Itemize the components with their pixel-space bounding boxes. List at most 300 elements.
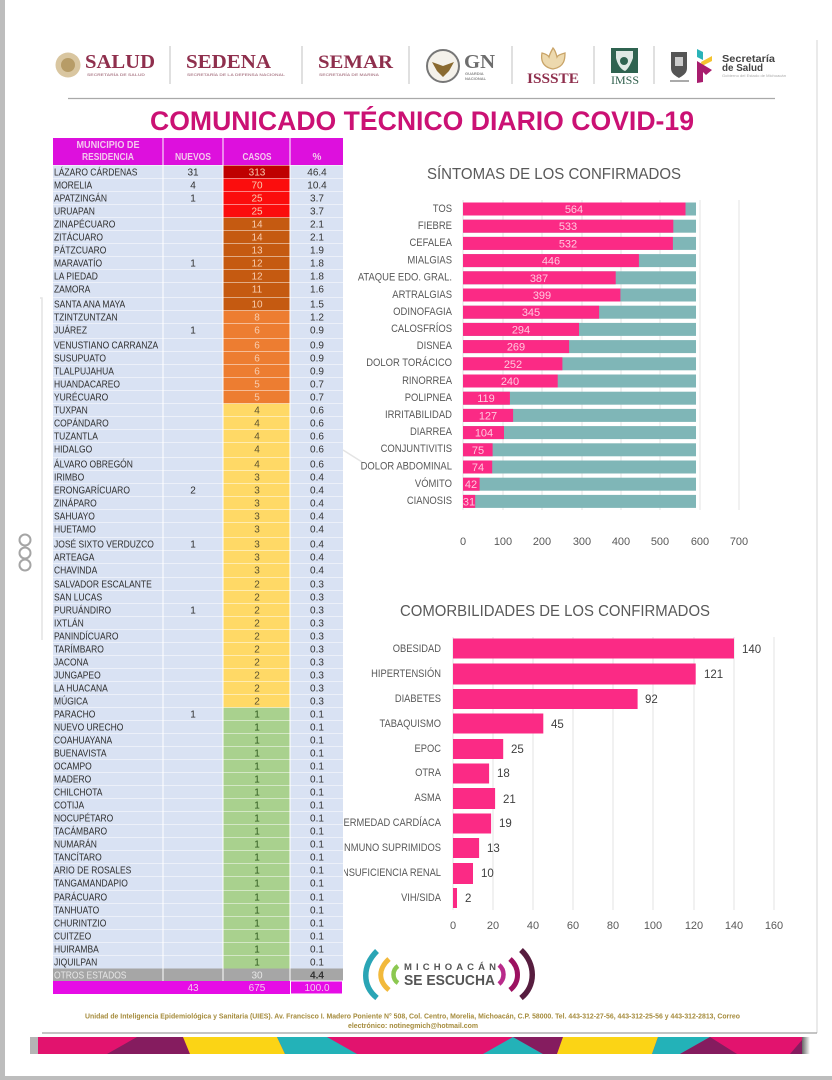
symptom labels: DOLOR TORÁCICO	[366, 355, 452, 369]
icon: binder rings	[20, 534, 30, 570]
otros estados row background	[53, 968, 343, 981]
symptom labels: FIEBRE	[418, 220, 452, 232]
percent column: 1.6	[310, 284, 324, 296]
municipality names: NUMARÁN	[54, 839, 97, 850]
comorbidity labels	[344, 644, 441, 901]
x axis: 140	[725, 920, 743, 932]
x axis: 100	[494, 536, 512, 548]
footer colour band	[30, 1037, 810, 1054]
percent column: 0.3	[310, 592, 324, 604]
percent column: 1.8	[310, 272, 324, 282]
municipality names: SANTA ANA MAYA	[54, 299, 126, 310]
percent column: 0.7	[310, 380, 324, 390]
symptom labels: DOLOR ABDOMINAL	[361, 461, 452, 473]
comorbidity values: 10	[481, 868, 494, 880]
percent column: 0.3	[310, 684, 324, 694]
municipality names: SAHUAYO	[54, 511, 95, 522]
percent column: 0.9	[310, 340, 324, 352]
municipality names: ARIO DE ROSALES	[54, 865, 131, 876]
teal total bars	[463, 202, 696, 508]
municipality names: ERONGARÍCUARO	[54, 485, 130, 496]
logo: Secretaría de Salud: Secretaría	[722, 54, 775, 65]
municipality names: HUIRAMBA	[54, 944, 100, 955]
comorbidity labels: INSUFICIENCIA RENAL	[339, 867, 441, 879]
percent column: 1.5	[310, 300, 324, 310]
municipality names: HUETAMO	[54, 524, 96, 535]
x axis: 60	[567, 920, 579, 932]
bar values: 42	[465, 479, 477, 491]
logo: Secretaría de Salud	[697, 49, 786, 83]
bar values: 294	[512, 324, 530, 336]
casos column: medium counts: 3	[254, 566, 260, 576]
symptom labels: ARTRALGIAS	[392, 289, 452, 301]
chart: comorbilidades de los confirmados	[325, 637, 783, 932]
logo: Sedena	[186, 51, 286, 77]
casos column: low counts: 1	[254, 788, 260, 798]
casos column: high counts: 6	[254, 340, 260, 352]
municipality names: ARTEAGA	[54, 552, 95, 563]
percent column: 0.1	[310, 722, 324, 734]
comorbidity labels: EPOC	[415, 743, 441, 755]
symptom labels: ODINOFAGIA	[393, 306, 452, 318]
nuevos column: 1	[190, 326, 196, 336]
percent column: 0.4	[310, 472, 324, 484]
municipality names: NOCUPÉTARO	[54, 813, 113, 824]
comorbidity values: 92	[645, 694, 658, 706]
percent column: 0.6	[310, 432, 324, 442]
municipality names: ZAMORA	[54, 284, 91, 295]
nuevos column: 1	[190, 258, 196, 270]
x axis	[460, 536, 748, 548]
symptom labels: TOS	[433, 203, 452, 215]
municipality names	[54, 167, 159, 981]
percent column: 1.2	[310, 312, 324, 324]
symptom labels: IRRITABILIDAD	[385, 409, 452, 421]
casos column: low counts: 1	[254, 866, 260, 876]
municipality names: JUNGAPEO	[54, 670, 101, 681]
casos column: medium counts: 2	[254, 658, 260, 668]
municipality names: COPÁNDARO	[54, 418, 109, 429]
logo: Guardia Nacional: GN	[464, 51, 496, 73]
casos column: low counts: 30	[251, 970, 263, 982]
logo: Guardia Nacional	[427, 50, 496, 82]
casos column: low counts: 1	[254, 774, 260, 786]
municipality names: PURUÁNDIRO	[54, 605, 111, 616]
municipality names: PARACHO	[54, 709, 95, 720]
municipality names: ZINAPÉCUARO	[54, 219, 115, 230]
casos column: high counts: 14	[251, 220, 263, 230]
municipality names: MORELIA	[54, 180, 93, 191]
table header: RESIDENCIA	[82, 152, 134, 163]
x axis: 120	[685, 920, 703, 932]
casos column: low counts: 1	[254, 878, 260, 890]
percent column: 0.1	[310, 944, 324, 956]
comorbidity labels: ENFERMEDAD CARDÍACA	[325, 815, 441, 829]
symptom labels	[358, 203, 452, 507]
percent column: 0.1	[310, 736, 324, 746]
casos column: medium counts: 2	[254, 606, 260, 616]
municipality names: SALVADOR ESCALANTE	[54, 579, 152, 590]
casos column: medium counts: 2	[254, 644, 260, 656]
municipality names: PÁTZCUARO	[54, 245, 106, 256]
percent column: 0.1	[310, 866, 324, 876]
municipality names: CHAVINDA	[54, 565, 98, 576]
casos column: low counts: 1	[254, 944, 260, 956]
bar values: 387	[530, 273, 548, 285]
casos column: medium counts	[254, 406, 260, 708]
comorbidity values: 45	[551, 719, 564, 731]
comorbidity labels: OTRA	[415, 767, 441, 779]
nuevos column: 1	[190, 606, 196, 616]
comorbidity values: 19	[499, 818, 512, 830]
comorbidity labels: OBESIDAD	[393, 643, 441, 655]
percent column: 0.6	[310, 418, 324, 430]
municipality names: PANINDÍCUARO	[54, 631, 118, 642]
casos column: low counts: 1	[254, 710, 260, 720]
comorbidity values: 121	[704, 669, 723, 681]
logo: Sedena: SEDENA	[186, 51, 272, 73]
percent column: 2.1	[310, 232, 324, 244]
footer address	[85, 1012, 740, 1030]
percent column: 0.1	[310, 748, 324, 760]
percent column: 0.4	[310, 524, 324, 536]
municipality names: HIDALGO	[54, 444, 92, 455]
casos column: low counts: 1	[254, 892, 260, 904]
bar values: 345	[522, 307, 540, 319]
municipality names: JACONA	[54, 657, 89, 668]
logo: IMSS	[611, 48, 639, 87]
percent column: 0.3	[310, 618, 324, 630]
pink symptom bars	[463, 202, 686, 508]
table header: %	[313, 152, 322, 163]
nuevos column: 43	[187, 983, 199, 994]
table header: CASOS	[242, 152, 272, 163]
percent column: 0.6	[310, 406, 324, 416]
casos column: high counts: 14	[251, 232, 263, 244]
x axis: 700	[730, 536, 748, 548]
bar values: 75	[472, 445, 484, 457]
comorbidity values	[465, 644, 761, 905]
municipality names: TANHUATO	[54, 905, 99, 916]
percent column: 1.9	[310, 246, 324, 256]
x axis: 0	[460, 536, 466, 548]
municipality names: COTIJA	[54, 800, 85, 811]
casos column: low counts: 1	[254, 800, 260, 812]
percent column: 0.7	[310, 392, 324, 404]
municipality names: TANCÍTARO	[54, 852, 102, 863]
logo: Salud: SECRETARÍA DE SALUD	[87, 72, 145, 77]
logo: ISSSTE: ISSSTE	[527, 71, 579, 87]
casos column: medium counts: 2	[254, 632, 260, 642]
comorbidity values: 18	[497, 768, 510, 780]
percent column: 4.4	[310, 970, 324, 982]
casos column: medium counts: 3	[254, 512, 260, 522]
percent column: 0.1	[310, 918, 324, 930]
percent column: 46.4	[307, 168, 327, 178]
x axis: 600	[691, 536, 709, 548]
percent column: 0.9	[310, 354, 324, 364]
nuevos column	[187, 168, 199, 994]
casos column: low counts: 1	[254, 918, 260, 930]
title: COMUNICADO TÉCNICO DIARIO COVID-19	[150, 105, 694, 136]
nuevos column: 4	[190, 180, 196, 192]
municipality names: HUANDACAREO	[54, 379, 120, 390]
x axis: 400	[612, 536, 630, 548]
casos column: medium counts: 3	[254, 486, 260, 496]
percent column: 0.1	[310, 826, 324, 838]
comorbidity labels: DIABETES	[395, 693, 441, 705]
municipality names: YURÉCUARO	[54, 392, 108, 403]
percent column	[304, 168, 330, 994]
municipality names: LA HUACANA	[54, 683, 109, 694]
casos column: medium counts: 2	[254, 618, 260, 630]
table header: MUNICIPIO DE	[76, 140, 140, 151]
casos column: medium counts: 3	[254, 524, 260, 536]
footer address: Unidad de Inteligencia Epidemiológica y Sanitaria (UIES). Av. Francisco I. Madero Poniente N° 508, Col. Centro, Morelia, Michoacán, C.P. 58000. Tel. 443-312-27-56, 443-312-25-56 y 443-312-2813, Correo	[85, 1012, 740, 1020]
percent column: 0.1	[310, 800, 324, 812]
percent column: 0.3	[310, 606, 324, 616]
municipality names: TZINTZUNTZAN	[54, 312, 118, 323]
comorbidity values: 13	[487, 843, 500, 855]
municipality names: VENUSTIANO CARRANZA	[54, 340, 159, 351]
percent column: 0.3	[310, 632, 324, 642]
table: casos por municipio	[53, 138, 343, 994]
municipality names: JUÁREZ	[54, 325, 87, 336]
percent column: 1.8	[310, 258, 324, 270]
percent column: 0.9	[310, 326, 324, 336]
casos column: medium counts: 3	[254, 552, 260, 564]
bar values: 564	[565, 204, 583, 216]
casos column: high counts: 12	[251, 258, 263, 270]
casos column: low counts: 1	[254, 826, 260, 838]
municipality names: COAHUAYANA	[54, 735, 113, 746]
logo: Guardia Nacional: GUARDIA	[465, 71, 484, 76]
x axis	[450, 920, 783, 932]
percent column: 0.4	[310, 566, 324, 576]
table header	[53, 138, 343, 165]
municipality names: OCAMPO	[54, 761, 92, 772]
casos column: medium counts: 3	[254, 498, 260, 510]
casos column: low counts: 1	[254, 748, 260, 760]
casos column: medium counts: 4	[254, 444, 260, 456]
bar values: 127	[479, 410, 497, 422]
percent column: 0.1	[310, 774, 324, 786]
percent column: 0.6	[310, 460, 324, 470]
symptom labels: MIALGIAS	[407, 255, 452, 267]
casos column: low counts: 1	[254, 958, 260, 968]
percent column: 0.3	[310, 696, 324, 708]
bar values: 74	[472, 462, 484, 474]
nuevos column: 1	[190, 194, 196, 204]
municipality names: IRIMBO	[54, 472, 84, 483]
percent column: 0.4	[310, 486, 324, 496]
casos column: high counts: 8	[254, 312, 260, 324]
casos column: high counts: 313	[249, 168, 266, 178]
casos column: low counts: 1	[254, 906, 260, 916]
percent column: 0.3	[310, 644, 324, 656]
symptom labels: ATAQUE EDO. GRAL.	[358, 272, 452, 284]
casos column: medium counts: 4	[254, 418, 260, 430]
casos column: medium counts: 2	[254, 696, 260, 708]
x axis: 300	[573, 536, 591, 548]
casos column: medium counts: 2	[254, 684, 260, 694]
casos column: high counts: 6	[254, 326, 260, 336]
comorbidity values: 21	[503, 794, 516, 806]
municipality names: OTROS ESTADOS	[54, 970, 126, 981]
municipality names: APATZINGÁN	[54, 193, 107, 204]
municipality names: MARAVATÍO	[54, 258, 102, 269]
percent column: 0.4	[310, 540, 324, 550]
percent column: 0.3	[310, 658, 324, 668]
casos column: low counts: 1	[254, 762, 260, 772]
casos colour bands	[223, 166, 290, 968]
casos column: medium counts: 2	[254, 580, 260, 590]
bar values: 240	[501, 376, 519, 388]
percent column: 0.1	[310, 710, 324, 720]
symptom labels: CIANOSIS	[407, 495, 452, 507]
municipality names: LÁZARO CÁRDENAS	[54, 167, 137, 178]
percent column: 0.1	[310, 906, 324, 916]
chart: síntomas de los confirmados	[358, 200, 748, 548]
casos column: low counts: 1	[254, 814, 260, 824]
percent column: 0.9	[310, 366, 324, 378]
percent column: 0.1	[310, 762, 324, 772]
logo: Michoacán se escucha: MICHOACÁN	[404, 962, 496, 973]
logo: ISSSTE	[527, 48, 579, 87]
casos column: low counts: 1	[254, 722, 260, 734]
bar values: 252	[504, 359, 522, 371]
casos column: low counts	[249, 710, 266, 994]
symptom labels: VÓMITO	[415, 476, 452, 490]
comorbidity labels: ASMA	[415, 792, 441, 804]
percent column: 3.7	[310, 206, 324, 218]
logo: Semar: SECRETARÍA DE MARINA	[319, 72, 379, 77]
logo: Salud: SALUD	[85, 51, 155, 73]
comorbidity labels: INMUNO SUPRIMIDOS	[341, 842, 441, 854]
logo: Michoacán se escucha: SE ESCUCHA	[404, 972, 495, 989]
casos column: high counts: 70	[251, 180, 263, 192]
percent column: 100.0	[304, 983, 330, 994]
logo: Michoacán crest	[670, 52, 689, 82]
symptom labels: CEFALEA	[409, 237, 452, 249]
percent column: 0.6	[310, 444, 324, 456]
bar values	[463, 204, 583, 508]
casos column: high counts: 12	[251, 272, 263, 282]
header logos	[56, 46, 786, 98]
casos column: high counts: 25	[251, 194, 263, 204]
percent column: 0.1	[310, 840, 324, 850]
symptom labels: POLIPNEA	[405, 392, 452, 404]
municipality names: JOSÉ SIXTO VERDUZCO	[54, 539, 154, 550]
percent column: 0.1	[310, 814, 324, 824]
x axis: 100	[644, 920, 662, 932]
percent column: 2.1	[310, 220, 324, 230]
x axis: 500	[651, 536, 669, 548]
bar values: 269	[507, 342, 525, 354]
logo: IMSS: IMSS	[611, 75, 639, 87]
municipality names: MADERO	[54, 774, 91, 785]
comorbidity bars	[453, 638, 734, 908]
municipality names: JIQUILPAN	[54, 957, 97, 968]
municipality names: SAN LUCAS	[54, 592, 102, 603]
municipality names: CHILCHOTA	[54, 787, 103, 798]
casos column: high counts: 5	[254, 392, 260, 404]
x axis: 40	[527, 920, 539, 932]
x axis: 20	[487, 920, 499, 932]
percent column: 0.1	[310, 788, 324, 798]
heading: síntomas: SÍNTOMAS DE LOS CONFIRMADOS	[427, 164, 681, 183]
logo: Salud	[56, 51, 155, 78]
casos column: high counts: 10	[251, 300, 263, 310]
percent column: 3.7	[310, 194, 324, 204]
municipality names: CUITZEO	[54, 931, 91, 942]
municipality names: PARÁCUARO	[54, 892, 107, 903]
municipality names: NUEVO URECHO	[54, 722, 123, 733]
bar values: 119	[477, 393, 495, 405]
symptom labels: CONJUNTIVITIS	[381, 443, 452, 455]
casos column: medium counts: 4	[254, 406, 260, 416]
casos column: high counts: 6	[254, 354, 260, 364]
municipality names: ZINÁPARO	[54, 498, 97, 509]
municipality names: TARÍMBARO	[54, 644, 104, 655]
municipality names: CHURINTZIO	[54, 918, 106, 929]
municipality names: TLALPUJAHUA	[54, 366, 115, 377]
bar values: 399	[533, 290, 551, 302]
municipality names: TUXPAN	[54, 405, 88, 416]
logo: Secretaría de Salud: Gobierno del Estado de Michoacán	[722, 74, 786, 78]
x axis: 160	[765, 920, 783, 932]
municipality names: IXTLÁN	[54, 618, 84, 629]
municipality names: TANGAMANDAPIO	[54, 878, 128, 889]
casos column: medium counts: 4	[254, 432, 260, 442]
casos column: high counts: 25	[251, 206, 263, 218]
casos column: medium counts: 2	[254, 670, 260, 682]
casos column: low counts: 1	[254, 932, 260, 942]
logo: Michoacán se escucha	[366, 950, 532, 998]
casos column: high counts: 11	[252, 284, 263, 296]
casos column: low counts: 1	[254, 736, 260, 746]
percent column: 0.3	[310, 580, 324, 590]
nuevos column: 2	[190, 486, 196, 496]
casos column: medium counts: 4	[254, 460, 260, 470]
bar values: 31	[463, 496, 475, 508]
casos column: high counts	[249, 168, 266, 404]
comorbidity values: 25	[511, 744, 524, 756]
x axis: 80	[607, 920, 619, 932]
nuevos column: 1	[190, 540, 196, 550]
casos column: low counts: 675	[249, 983, 266, 994]
casos column: medium counts: 3	[254, 540, 260, 550]
municipality names: LA PIEDAD	[54, 271, 98, 282]
casos column: low counts: 1	[254, 852, 260, 864]
x axis: 0	[450, 920, 456, 932]
table header: NUEVOS	[175, 152, 211, 163]
nuevos column: 1	[190, 710, 196, 720]
symptom labels: RINORREA	[402, 375, 452, 387]
municipality names: URUAPAN	[54, 206, 95, 217]
percent column: 0.1	[310, 892, 324, 904]
casos column: medium counts: 2	[254, 592, 260, 604]
comorbidity labels: VIH/SIDA	[401, 892, 441, 904]
percent column: 0.4	[310, 512, 324, 522]
casos column: medium counts: 3	[254, 472, 260, 484]
percent column: 0.4	[310, 552, 324, 564]
bar values: 446	[542, 256, 560, 268]
percent column: 0.1	[310, 932, 324, 942]
x axis: 200	[533, 536, 551, 548]
municipality names: MÚGICA	[54, 696, 89, 707]
percent column: 0.1	[310, 878, 324, 890]
